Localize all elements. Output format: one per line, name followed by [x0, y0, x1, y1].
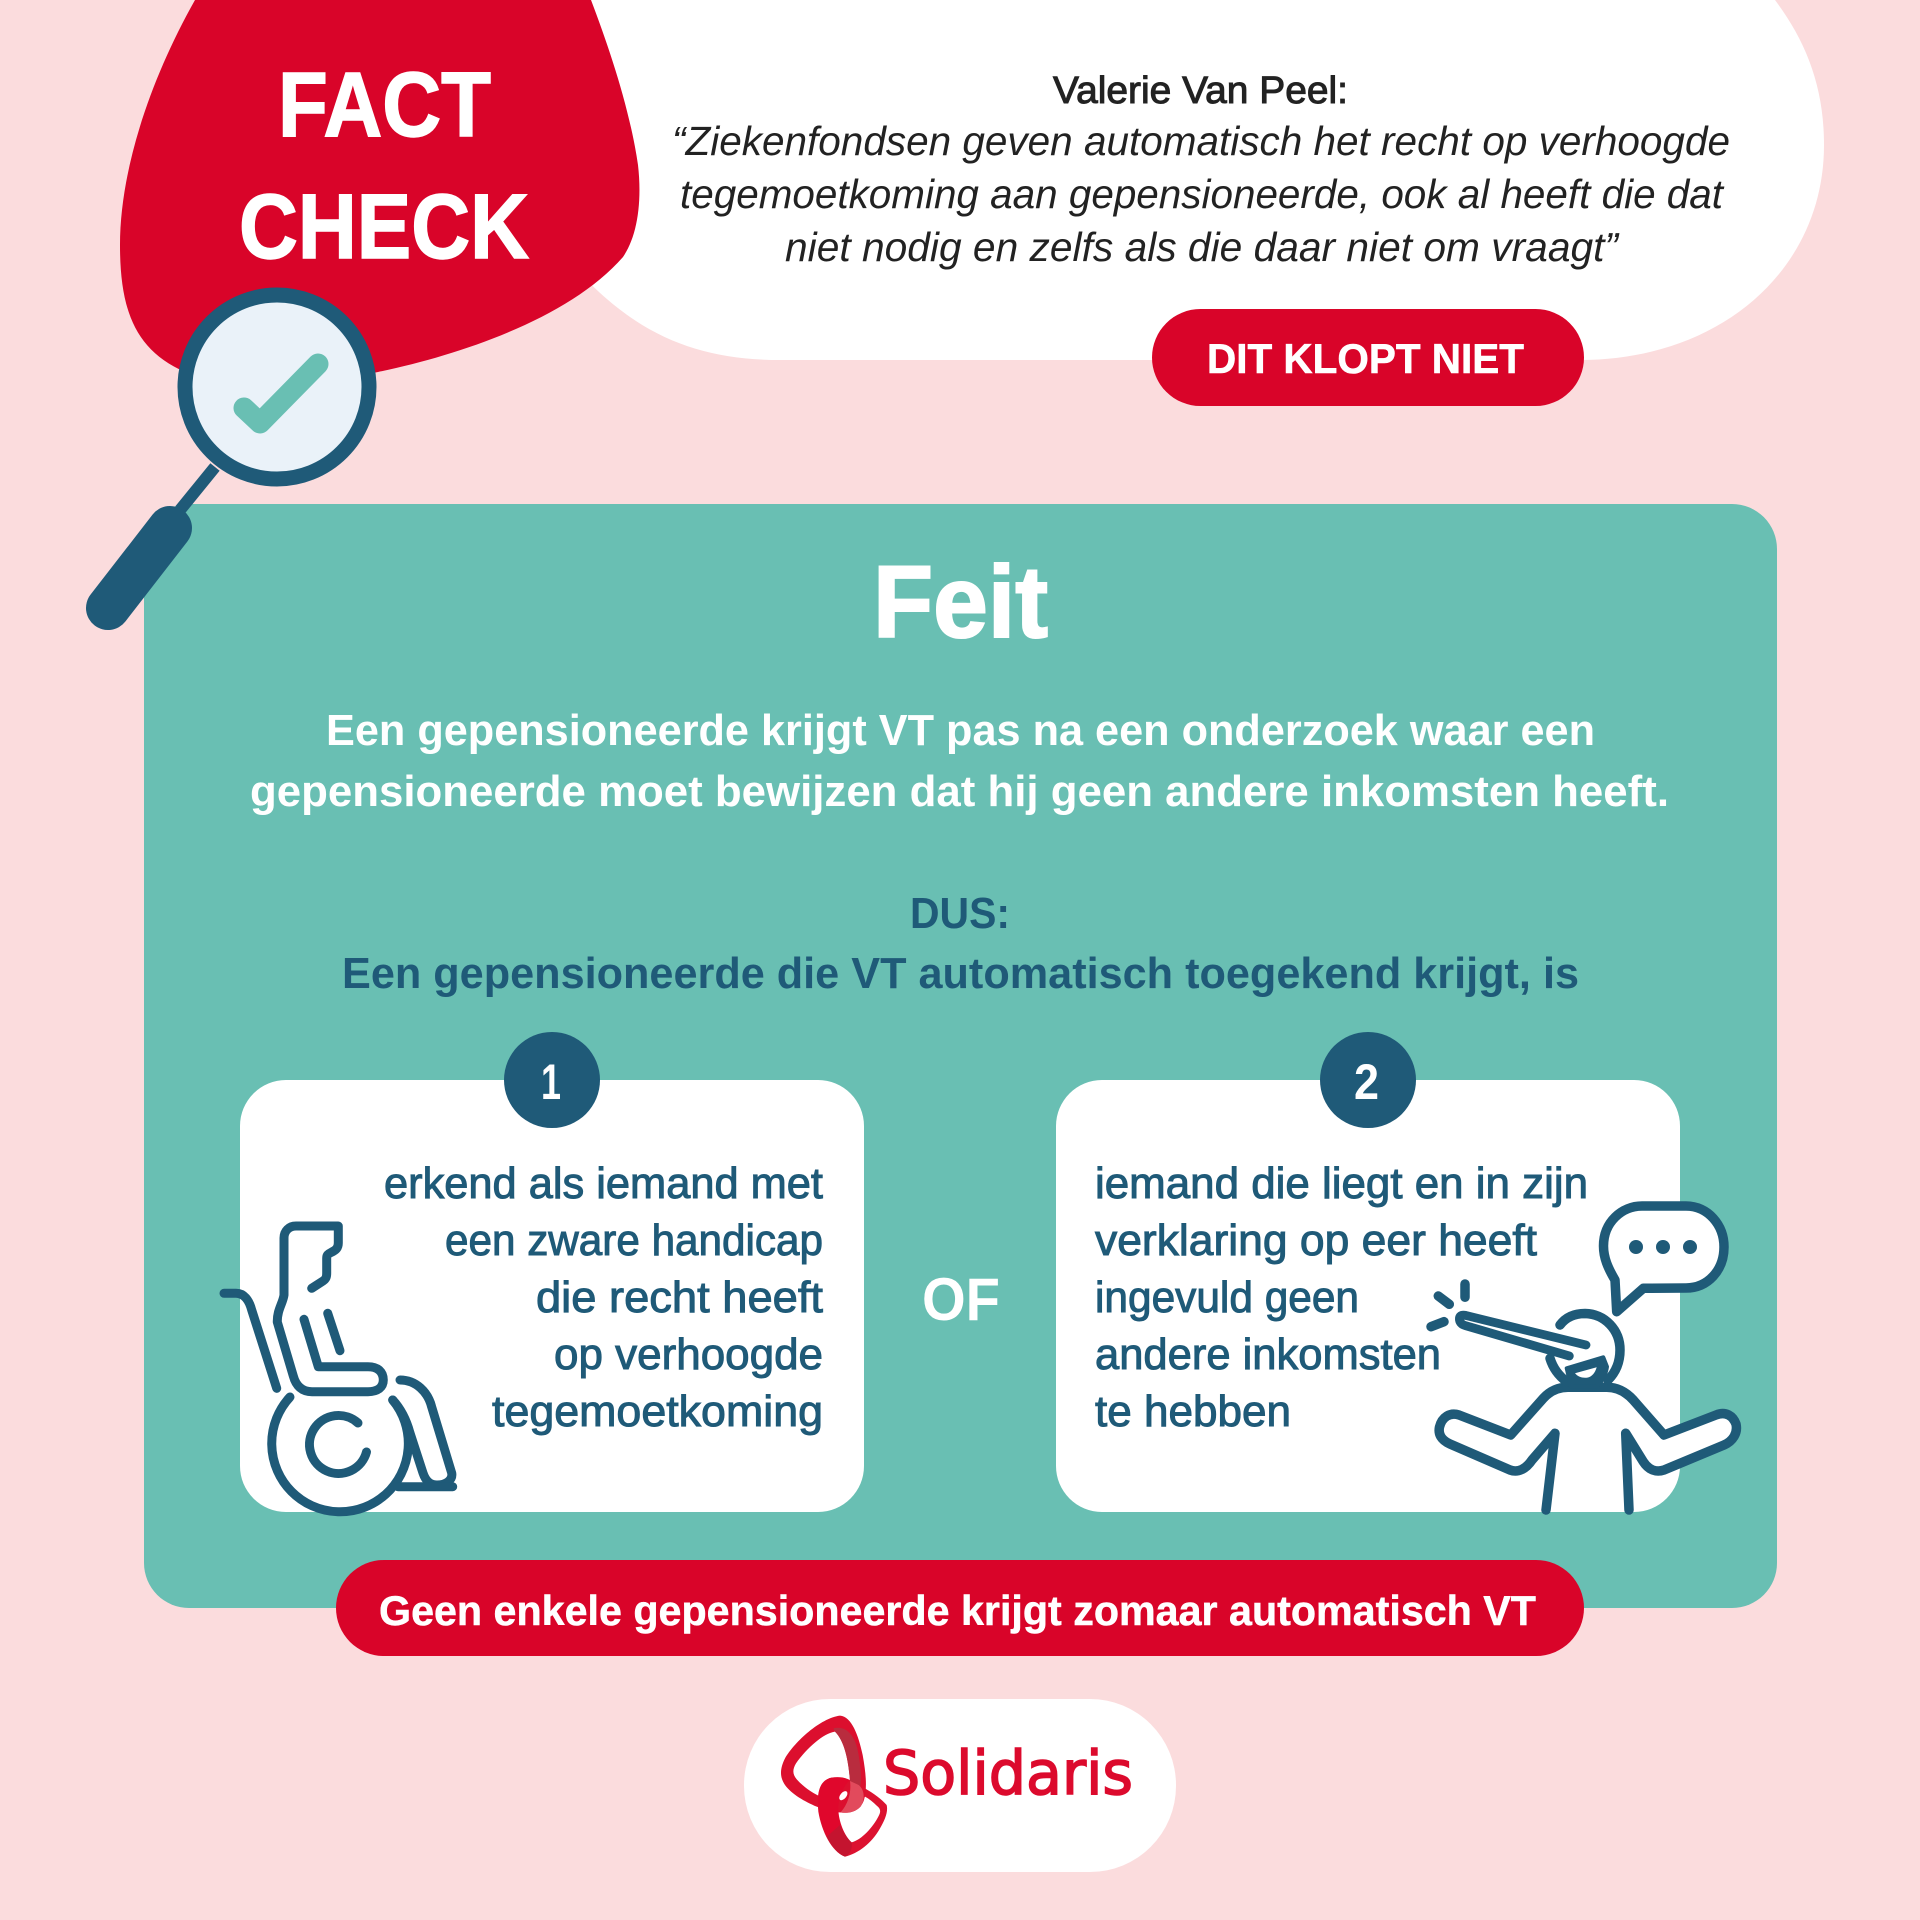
card 2 [1056, 1032, 1736, 1512]
quote text: niet nodig en zelfs als die daar niet om vraagt” [785, 224, 1620, 270]
teal panel [144, 504, 1777, 1608]
explanation text: gepensioneerde moet bewijzen dat hij geen andere inkomsten heeft. [250, 767, 1669, 816]
conclusion pill: Geen enkele gepensioneerde krijgt zomaar automatisch VT [379, 1587, 1536, 1634]
heading: fact check: FACT [278, 54, 491, 156]
quote text: tegemoetkoming aan gepensioneerde, ook al heeft die dat [680, 171, 1725, 217]
card 2 text: ingevuld geen [1095, 1273, 1359, 1322]
card 2 text [1095, 1159, 1588, 1436]
conclusion text: DUS: [910, 889, 1010, 938]
connector: of: OF [922, 1266, 1000, 1333]
conclusion text [342, 889, 1579, 998]
logo wordmark: Solidaris [883, 1738, 1133, 1809]
conclusion pill [336, 1560, 1584, 1656]
card 1 [224, 1032, 864, 1512]
explanation text [250, 706, 1669, 816]
card 1 text: op verhoogde [554, 1330, 823, 1379]
logo mark: interlocked rings [781, 1716, 887, 1857]
panel: feit [144, 504, 1777, 1608]
quote text: “Ziekenfondsen geven automatisch het recht op verhoogde [672, 118, 1730, 164]
card 2 text: andere inkomsten [1095, 1330, 1441, 1379]
quote text [672, 118, 1730, 270]
red fact check blob [120, 0, 639, 384]
icon: magnifying glass [108, 295, 369, 608]
heading: fact check: CHECK [239, 176, 529, 278]
card 1 text: die recht heeft [536, 1273, 823, 1322]
card 1 text: erkend als iemand met [384, 1159, 823, 1208]
card 1 text [384, 1159, 823, 1436]
verdict pill: DIT KLOPT NIET [1207, 335, 1524, 382]
number badge 1 [504, 1032, 600, 1128]
card 1 text: een zware handicap [445, 1216, 823, 1265]
panel: quote bubble [560, 0, 1824, 406]
number badge 2: 2 [1354, 1054, 1379, 1110]
white quote shape [560, 0, 1824, 360]
card 1 text: tegemoetkoming [492, 1387, 823, 1436]
card 2 text: te hebben [1095, 1387, 1291, 1436]
number badge 1: 1 [541, 1054, 561, 1110]
card 2 text: iemand die liegt en in zijn [1095, 1159, 1588, 1208]
explanation text: Een gepensioneerde krijgt VT pas na een onderzoek waar een [326, 706, 1595, 755]
card 2 text: verklaring op eer heeft [1095, 1216, 1537, 1265]
quote speaker: Valerie Van Peel: [1053, 70, 1348, 112]
icon: lying person with long nose [1431, 1206, 1736, 1510]
icon: wheelchair user [224, 1226, 453, 1512]
conclusion text: Een gepensioneerde die VT automatisch toegekend krijgt, is [342, 949, 1579, 998]
logo: solidaris [744, 1699, 1176, 1872]
heading: feit: Feit [873, 545, 1048, 659]
verdict pill [1152, 309, 1584, 406]
number badge 2 [1320, 1032, 1416, 1128]
heading: fact check [239, 54, 529, 278]
